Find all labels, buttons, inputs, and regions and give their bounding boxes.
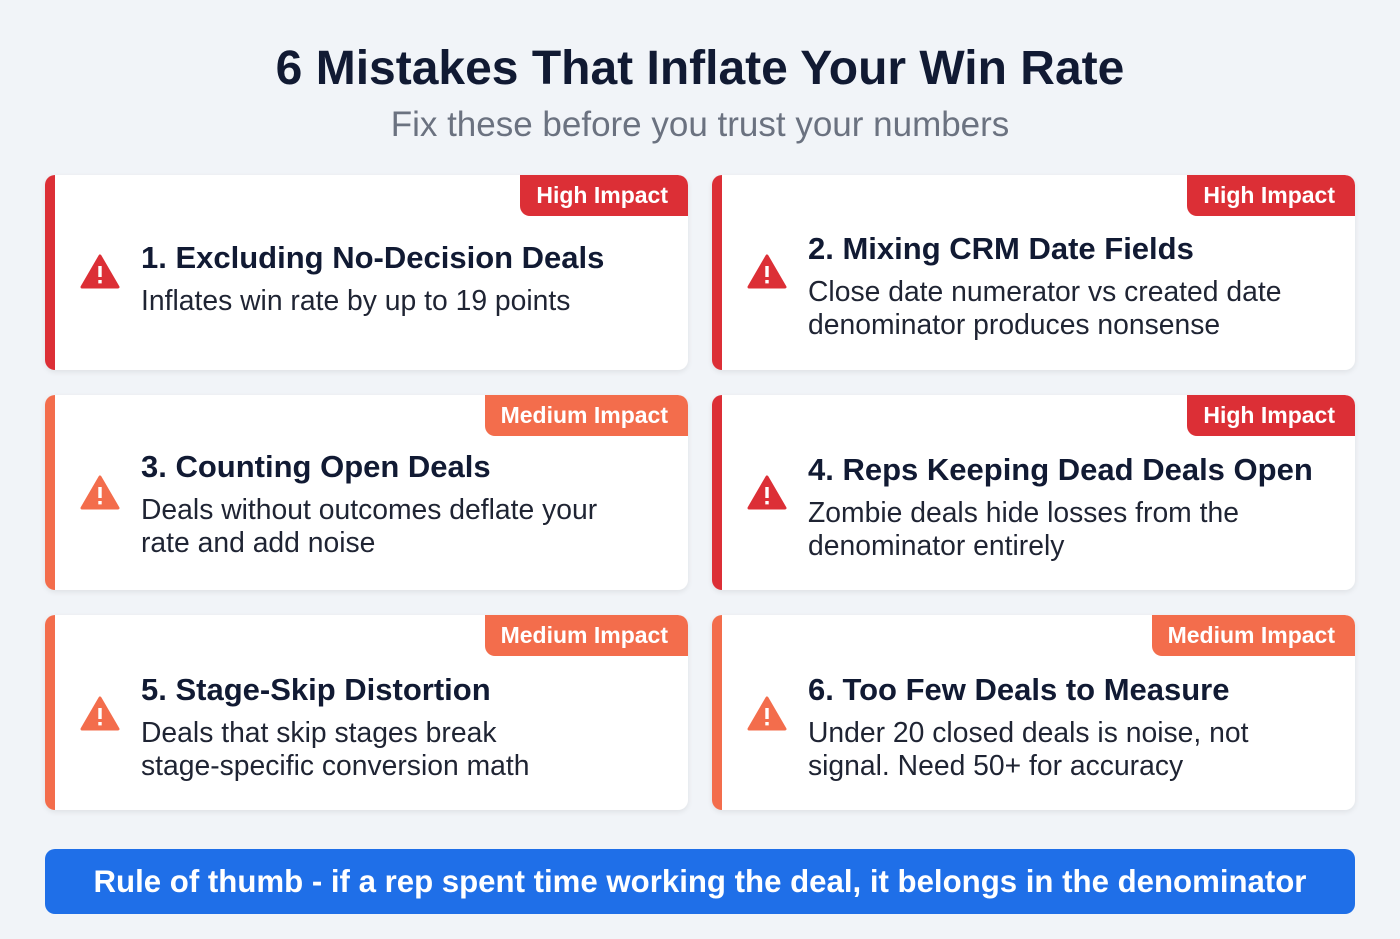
text: [141, 240, 604, 316]
text: 3. Counting Open Deals: [141, 449, 491, 484]
title: 6 Mistakes That Inflate Your Win Rate: [276, 42, 1124, 95]
text: denominator produces nonsense: [808, 308, 1220, 340]
panel: card 4: [712, 395, 1355, 590]
text: 1. Excluding No-Decision Deals: [141, 240, 604, 275]
badge: High Impact: [1203, 402, 1335, 428]
text: 6. Too Few Deals to Measure: [808, 672, 1229, 707]
badge: [1152, 615, 1355, 656]
badge: [1187, 175, 1355, 216]
panel: card 5: [45, 615, 688, 810]
panel: card 3: [45, 395, 688, 590]
badge: Medium Impact: [501, 402, 668, 428]
icon: warning: [80, 696, 120, 730]
icon: warning: [748, 254, 787, 288]
icon: warning: [748, 696, 787, 730]
callout: rule of thumb banner: Rule of thumb - if a rep spent time working the deal, it belongs in the denominator: [94, 864, 1306, 899]
panel: card 2: [712, 175, 1355, 370]
text: [141, 449, 597, 558]
text: 4. Reps Keeping Dead Deals Open: [808, 452, 1313, 487]
icon: warning: [80, 475, 120, 510]
text: Deals without outcomes deflate your: [141, 493, 597, 525]
text: Inflates win rate by up to 19 points: [141, 284, 570, 316]
badge: [485, 395, 688, 436]
text: [808, 672, 1248, 781]
text: rate and add noise: [141, 526, 375, 558]
badge: [485, 615, 688, 656]
text: [141, 672, 529, 781]
text: 5. Stage-Skip Distortion: [141, 672, 491, 707]
badge: [1187, 395, 1355, 436]
badge: [520, 175, 688, 216]
text: [808, 231, 1281, 340]
text: signal. Need 50+ for accuracy: [808, 749, 1183, 781]
badge: Medium Impact: [1168, 622, 1335, 648]
panel: card 1: [45, 175, 688, 370]
icon: warning: [80, 254, 120, 288]
text: Deals that skip stages break: [141, 716, 496, 748]
text: Zombie deals hide losses from the: [808, 496, 1239, 528]
text: Under 20 closed deals is noise, not: [808, 716, 1248, 748]
badge: High Impact: [536, 182, 668, 208]
callout: rule of thumb banner: [45, 849, 1355, 914]
text: [808, 452, 1313, 561]
text: stage-specific conversion math: [141, 749, 529, 781]
panel: card 6: [712, 615, 1355, 810]
text: 2. Mixing CRM Date Fields: [808, 231, 1194, 266]
badge: High Impact: [1203, 182, 1335, 208]
icon: warning: [748, 475, 787, 510]
badge: Medium Impact: [501, 622, 668, 648]
text: denominator entirely: [808, 529, 1064, 561]
subtitle: Fix these before you trust your numbers: [391, 105, 1009, 144]
text: Close date numerator vs created date: [808, 275, 1281, 307]
